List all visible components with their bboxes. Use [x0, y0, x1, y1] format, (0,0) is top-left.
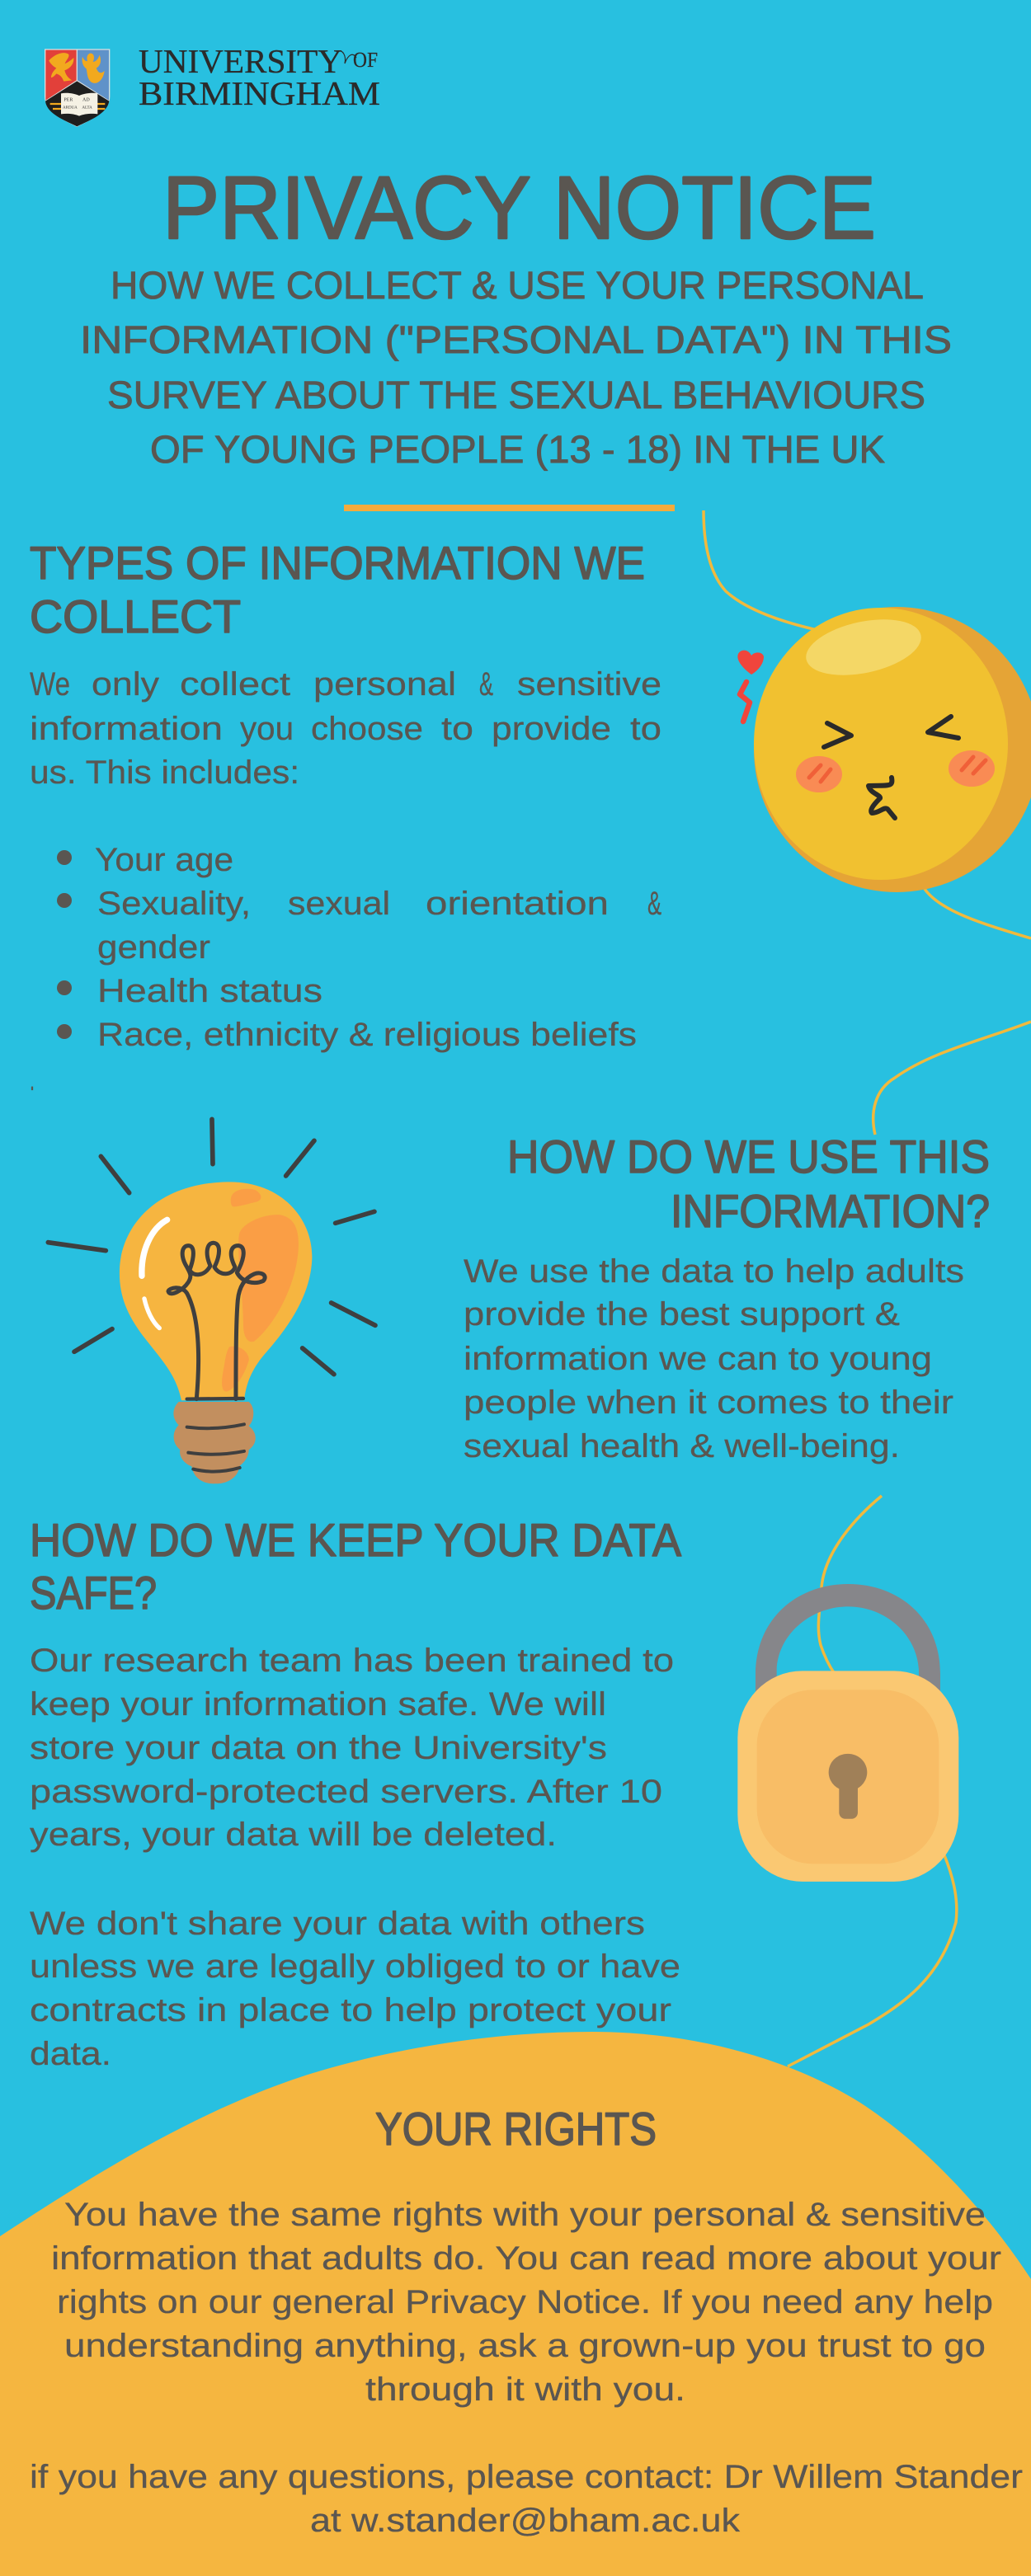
bullet list: sexual: [288, 886, 390, 922]
icon: shackle: [756, 1584, 940, 1694]
bullet list: orientation: [426, 886, 609, 922]
body text: information that adults do. You can read more about your: [51, 2240, 1001, 2277]
string: below balloon: [925, 889, 1031, 938]
heading: TYPES OF INFORMATION WE: [30, 537, 645, 589]
body text: sharing: data.: [30, 2036, 111, 2072]
body text: storage: password-protected servers. After 10: [30, 1774, 662, 1810]
icon: padlock: [737, 1584, 958, 1882]
wordmark: BIRMINGHAM: [139, 74, 380, 112]
body text: information we can to young: [464, 1341, 932, 1377]
intro text: We: [30, 666, 70, 703]
panel: types of information: [30, 537, 661, 1098]
icon: crest shield: PER: [64, 96, 73, 102]
wordmark: UNIVERSITY: [139, 42, 342, 80]
bullet list: gender: [97, 929, 210, 966]
heading: [30, 537, 645, 642]
body text: storage: keep your information safe. We will: [30, 1686, 606, 1723]
icon: crest shield: AD: [82, 96, 90, 102]
heading: HOW DO WE USE THIS: [507, 1131, 990, 1182]
body text: You have the same rights with your personal & sensitive: [64, 2197, 986, 2233]
body text: people when it comes to their: [464, 1384, 953, 1421]
intro text: you: [240, 711, 294, 747]
intro text: [30, 666, 661, 791]
intro text: only: [92, 666, 159, 703]
icon: crest shield: ARDUA: [63, 106, 78, 110]
intro text: us. This includes:: [30, 754, 299, 791]
body text: [51, 2197, 1001, 2408]
body text: rights on our general Privacy Notice. If you need any help: [57, 2284, 993, 2320]
body text: We use the data to help adults: [464, 1253, 964, 1290]
heading: SAFE?: [30, 1567, 157, 1619]
body text: storage: years, your data will be deleted.: [30, 1817, 557, 1853]
icon: filament: [168, 1243, 265, 1399]
wordmark: OF: [353, 48, 378, 72]
body text: sharing: contracts in place to help protect your: [30, 1992, 671, 2028]
bullet list: Race, ethnicity & religious beliefs: [97, 1017, 637, 1053]
contact text: [30, 2459, 1023, 2539]
intro text: information: [30, 711, 223, 747]
icon: bulb rays: [48, 1119, 375, 1375]
body text: sexual health & well-being.: [464, 1428, 900, 1464]
intro text: to: [630, 711, 661, 747]
bullet list: Sexuality,: [97, 886, 251, 922]
body text: sharing: [30, 1906, 680, 2072]
intro text: to: [441, 711, 473, 747]
body text: through it with you.: [365, 2372, 685, 2408]
bullet list: &: [647, 886, 661, 922]
body text: understanding anything, ask a grown-up you trust to go: [64, 2328, 986, 2364]
panel: how do we use this information: [464, 1131, 990, 1464]
intro text: choose: [311, 711, 423, 747]
heading: [30, 1514, 682, 1619]
string: lock strings: [788, 1496, 957, 2066]
intro text: sensitive: [517, 666, 661, 703]
title: PRIVACY NOTICE: [162, 157, 876, 257]
intro text: provide: [492, 711, 611, 747]
body text: provide the best support &: [464, 1296, 900, 1333]
body text: storage: store your data on the University's: [30, 1730, 607, 1766]
body text: sharing: We don't share your data with others: [30, 1906, 645, 1942]
body text: storage: [30, 1643, 674, 1853]
subtitle: HOW WE COLLECT & USE YOUR PERSONAL: [111, 263, 924, 307]
title divider: [344, 505, 675, 511]
body text: [464, 1253, 964, 1464]
logo: University of Birmingham: [45, 42, 380, 127]
body text: sharing: unless we are legally obliged to or have: [30, 1948, 680, 1985]
wordmark: [139, 42, 380, 112]
heading: INFORMATION?: [671, 1185, 990, 1237]
intro text: &: [479, 666, 493, 703]
subtitle: [80, 263, 952, 471]
bullet list: Your age: [95, 842, 233, 878]
icon: keyhole: [829, 1754, 867, 1819]
subtitle: OF YOUNG PEOPLE (13 - 18) IN THE UK: [150, 427, 885, 471]
heading: HOW DO WE KEEP YOUR DATA: [30, 1514, 682, 1566]
panel: how do we keep your data safe: [30, 1514, 682, 2072]
heading: COLLECT: [30, 590, 241, 642]
icon: screw base: [173, 1398, 256, 1483]
intro text: personal: [313, 666, 456, 703]
panel: your rights: [30, 2103, 1023, 2539]
contact text: at w.stander@bham.ac.uk: [310, 2503, 741, 2539]
icon: crest shield: [45, 49, 110, 127]
string: top of balloon: [704, 510, 821, 631]
string: balloon to next section: [873, 1022, 1031, 1135]
heading: YOUR RIGHTS: [375, 2103, 657, 2155]
bullet list: Health status: [97, 973, 322, 1009]
bullet list: .: [30, 1061, 35, 1098]
bullet list: [30, 842, 661, 1098]
subtitle: SURVEY ABOUT THE SEXUAL BEHAVIOURS: [107, 373, 925, 416]
subtitle: INFORMATION ("PERSONAL DATA") IN THIS: [80, 317, 952, 361]
icon: light bulb: [48, 1119, 375, 1483]
icon: crest shield: ALTA: [82, 106, 92, 110]
contact text: if you have any questions, please contact: Dr Willem Stander: [30, 2459, 1023, 2495]
icon: lock body: [737, 1671, 958, 1882]
intro text: collect: [180, 666, 290, 703]
panel: your rights background: [0, 2032, 1031, 2576]
icon: bulb glass: [120, 1182, 312, 1400]
body text: storage: Our research team has been trained to: [30, 1643, 674, 1679]
heading: [507, 1131, 990, 1237]
icon: kissing emoji balloon: [737, 607, 1031, 892]
